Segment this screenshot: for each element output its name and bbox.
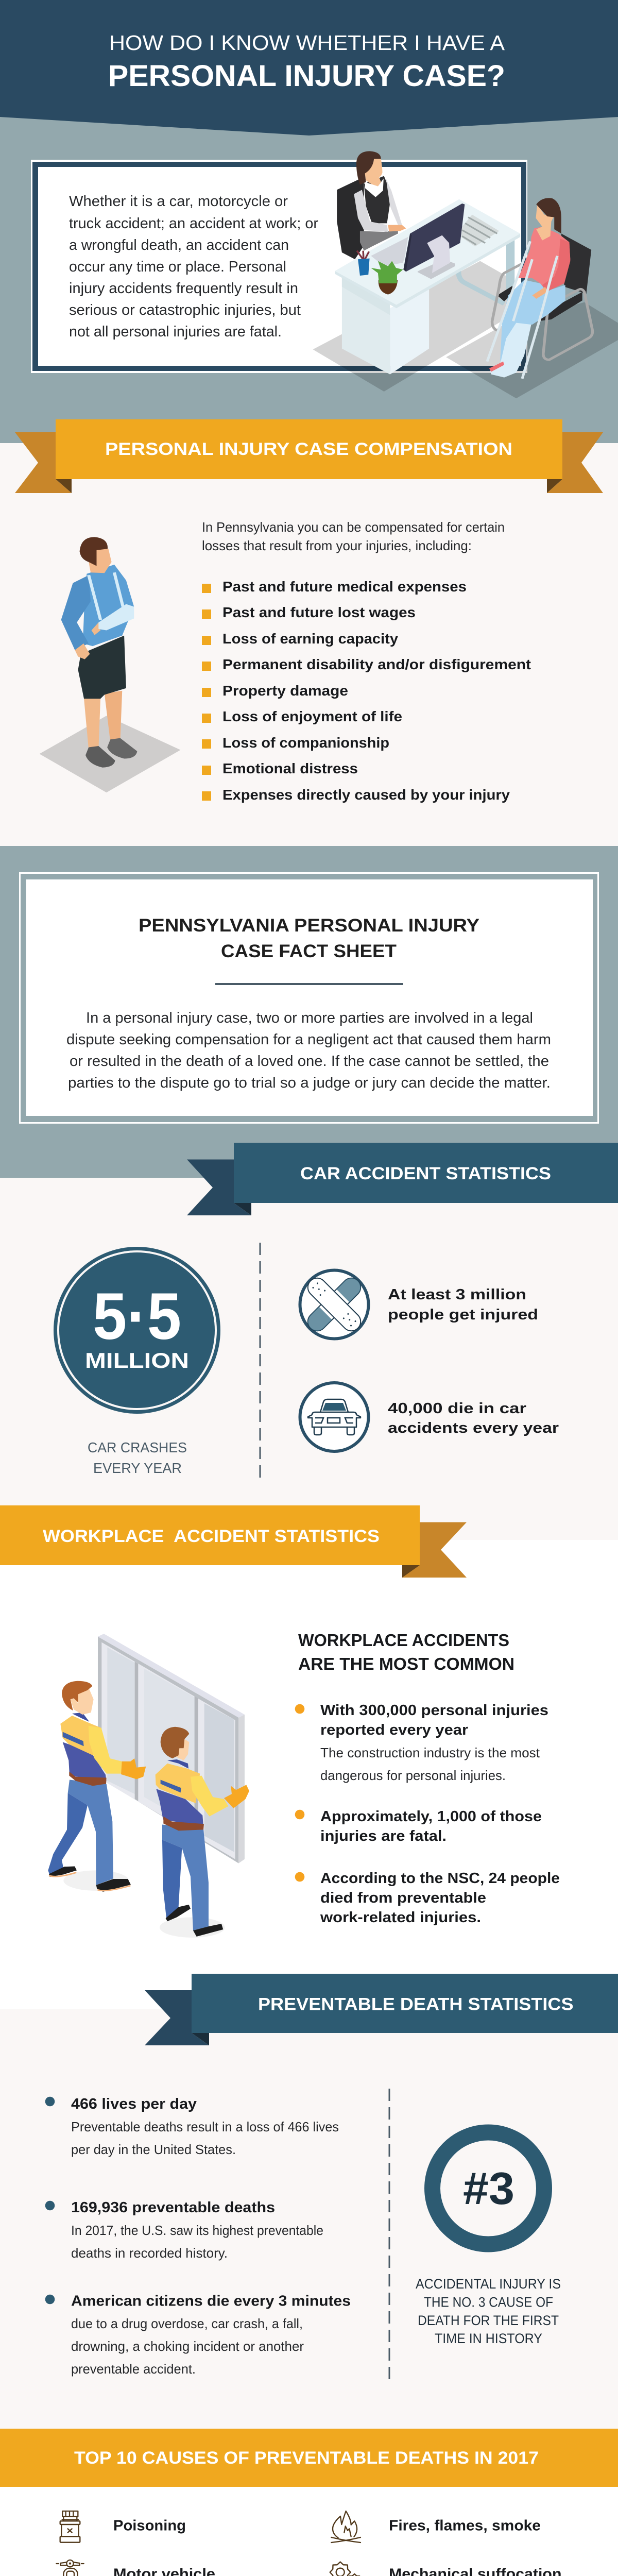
workplace bullet: NSC 24 people: died from preventable xyxy=(320,1890,486,1906)
workplace bullet: 300,000 personal injuries: dangerous for personal injuries. xyxy=(320,1768,506,1783)
caption: car crashes every year: EVERY YEAR xyxy=(93,1460,182,1476)
stat: 40,000 die in car accidents: accidents every year xyxy=(388,1420,559,1436)
workplace bullet: NSC 24 people xyxy=(295,1870,560,1926)
caption: accidental injury is the no. 3 cause: THE NO. 3 CAUSE OF xyxy=(424,2295,553,2310)
stat: 40,000 die in car accidents: 40,000 die in car xyxy=(388,1400,526,1417)
compensation checklist: Expenses directly caused by your injury xyxy=(222,787,510,803)
intro paragraph: occur any time or place. Personal xyxy=(69,259,286,275)
caption: car crashes every year: CAR CRASHES xyxy=(88,1439,187,1455)
icon: crossed bandages xyxy=(300,1270,369,1338)
caption: accidental injury is the no. 3 cause: ACCIDENTAL INJURY IS xyxy=(416,2276,561,2292)
illustration: two workers carrying a window xyxy=(48,1634,249,1938)
preventable bullet: every 3 minutes xyxy=(45,2293,351,2377)
intro paragraph: Whether it is a car, motorcycle or xyxy=(69,193,288,210)
ribbon heading: car accident statistics: CAR ACCIDENT STATISTICS xyxy=(300,1164,551,1183)
compensation intro text xyxy=(202,519,505,553)
panel: Pennsylvania personal injury case fact sheet xyxy=(19,872,599,1124)
preventable bullet: 466 lives per day: 466 lives per day xyxy=(71,2096,197,2112)
caption: accidental injury is the no. 3 cause: DEATH FOR THE FIRST xyxy=(418,2313,559,2328)
intro paragraph: not all personal injuries are fatal. xyxy=(69,324,282,340)
stat circle: 5.5 million: MILLION xyxy=(85,1348,189,1372)
compensation intro text: In Pennsylvania you can be compensated for certain xyxy=(202,519,505,535)
heading: workplace accidents are the most common: ARE THE MOST COMMON xyxy=(298,1654,514,1673)
title: PERSONAL INJURY CASE? xyxy=(108,59,505,93)
stat: at least 3 million injured: people get injured xyxy=(388,1307,538,1323)
ribbon heading: preventable death statistics xyxy=(145,1974,618,2045)
stat circle: 5.5 million: 5·5 xyxy=(93,1280,181,1353)
ribbon heading: workplace accident statistics: WORKPLACE ACCIDENT STATISTICS xyxy=(43,1527,380,1546)
fact sheet paragraph xyxy=(66,1010,551,1091)
compensation checklist: Loss of enjoyment of life xyxy=(222,708,402,724)
heading bar: top 10 causes xyxy=(0,2429,618,2487)
preventable bullet: 466 lives per day: per day in the United States. xyxy=(71,2142,236,2157)
icon: poisoning bottle xyxy=(60,2511,80,2543)
fact sheet heading xyxy=(139,916,479,961)
caption: accidental injury is the no. 3 cause xyxy=(416,2276,561,2346)
compensation intro text: losses that result from your injuries, including: xyxy=(202,538,472,553)
icon: car front xyxy=(300,1383,369,1451)
workplace bullet: 300,000 personal injuries: With 300,000 personal injuries xyxy=(320,1702,548,1719)
compensation checklist: Loss of earning capacity xyxy=(222,631,398,647)
label: poisoning: Poisoning xyxy=(113,2517,186,2534)
preventable bullet: 466 lives per day xyxy=(45,2096,339,2157)
intro paragraph: truck accident; an accident at work; or xyxy=(69,215,318,232)
label: fires, flames, smoke: Fires, flames, smoke xyxy=(389,2517,541,2534)
intro paragraph: serious or catastrophic injuries, but xyxy=(69,302,301,318)
preventable bullet: 466 lives per day: Preventable deaths result in a loss of 466 lives xyxy=(71,2119,339,2134)
preventable bullet: 169,936 deaths: deaths in recorded history. xyxy=(71,2245,228,2261)
fact sheet heading: CASE FACT SHEET xyxy=(221,941,397,961)
heading bar: top 10 causes: TOP 10 CAUSES OF PREVENTABLE DEATHS IN 2017 xyxy=(74,2448,539,2468)
workplace bullet: NSC 24 people: work-related injuries. xyxy=(320,1909,481,1926)
workplace bullet: 1,000 fatal injuries xyxy=(295,1808,542,1844)
title: HOW DO I KNOW WHETHER I HAVE A xyxy=(109,31,505,55)
stat ring: number 3: #3 xyxy=(463,2163,514,2214)
icon: mechanical gears xyxy=(330,2562,362,2576)
stat circle: 5.5 million xyxy=(54,1247,220,1414)
stat: at least 3 million injured: At least 3 million xyxy=(388,1286,526,1303)
preventable bullet: every 3 minutes: due to a drug overdose, car crash, a fall, xyxy=(71,2316,303,2331)
heading: workplace accidents are the most common: WORKPLACE ACCIDENTS xyxy=(298,1631,509,1650)
intro paragraph: injury accidents frequently result in xyxy=(69,280,298,297)
illustration: attorney and injured client at desk xyxy=(313,151,618,398)
stat ring: number 3 xyxy=(433,2132,544,2244)
caption: accidental injury is the no. 3 cause: TIME IN HISTORY xyxy=(435,2331,542,2346)
fact sheet paragraph: In a personal injury case, two or more parties are involved in a legal xyxy=(86,1010,533,1026)
fact sheet paragraph: parties to the dispute go to trial so a judge or jury can decide the matter. xyxy=(68,1075,551,1091)
panel: introduction text box xyxy=(31,160,527,373)
heading: workplace accidents are the most common xyxy=(298,1631,514,1673)
workplace bullet: 1,000 fatal injuries: Approximately, 1,000 of those xyxy=(320,1808,542,1825)
fact sheet paragraph: dispute seeking compensation for a negligent act that caused them harm xyxy=(66,1031,551,1048)
compensation checklist: Permanent disability and/or disfigurement xyxy=(222,656,531,672)
stat: 40,000 die in car accidents xyxy=(388,1400,559,1436)
icon: fire flames xyxy=(331,2511,360,2543)
ribbon heading: car accident statistics xyxy=(187,1143,618,1215)
compensation checklist: Past and future lost wages xyxy=(222,604,416,620)
intro paragraph xyxy=(69,193,318,340)
compensation checklist: Property damage xyxy=(222,683,348,699)
preventable bullet: 169,936 deaths: 169,936 preventable deaths xyxy=(71,2199,275,2216)
fact sheet heading: PENNSYLVANIA PERSONAL INJURY xyxy=(139,916,479,936)
compensation checklist: Loss of companionship xyxy=(222,735,389,751)
intro paragraph: a wrongful death, an accident can xyxy=(69,237,289,253)
illustration: man with arm in sling xyxy=(40,537,181,792)
header banner xyxy=(0,0,618,135)
workplace bullet: 300,000 personal injuries: reported every year xyxy=(320,1722,468,1738)
workplace bullet: NSC 24 people: According to the NSC, 24 people xyxy=(320,1870,560,1887)
compensation checklist: Past and future medical expenses xyxy=(222,579,467,595)
fact sheet paragraph: or resulted in the death of a loved one. If the case cannot be settled, the xyxy=(70,1053,549,1070)
stat: at least 3 million injured xyxy=(388,1286,538,1323)
preventable bullet: every 3 minutes: American citizens die every 3 minutes xyxy=(71,2293,351,2309)
ribbon heading: preventable death statistics: PREVENTABLE DEATH STATISTICS xyxy=(258,1995,574,2014)
ribbon heading: personal injury case compensation xyxy=(15,419,603,493)
workplace bullet: 1,000 fatal injuries: injuries are fatal. xyxy=(320,1828,447,1844)
preventable bullet: every 3 minutes: preventable accident. xyxy=(71,2361,196,2377)
preventable bullet: every 3 minutes: drowning, a choking incident or another xyxy=(71,2338,304,2354)
ribbon heading: personal injury case compensation: PERSONAL INJURY CASE COMPENSATION xyxy=(105,439,512,459)
compensation checklist xyxy=(202,579,531,803)
workplace bullet: 300,000 personal injuries xyxy=(295,1702,548,1783)
icon: motor vehicle scooter xyxy=(56,2560,84,2576)
preventable bullet: 169,936 deaths xyxy=(45,2199,323,2261)
caption: car crashes every year xyxy=(88,1439,187,1476)
compensation checklist: Emotional distress xyxy=(222,760,358,776)
preventable bullet: 169,936 deaths: In 2017, the U.S. saw its highest preventable xyxy=(71,2223,323,2238)
ribbon heading: workplace accident statistics xyxy=(0,1505,467,1578)
title xyxy=(108,31,505,93)
workplace bullet: 300,000 personal injuries: The construction industry is the most xyxy=(320,1745,540,1760)
